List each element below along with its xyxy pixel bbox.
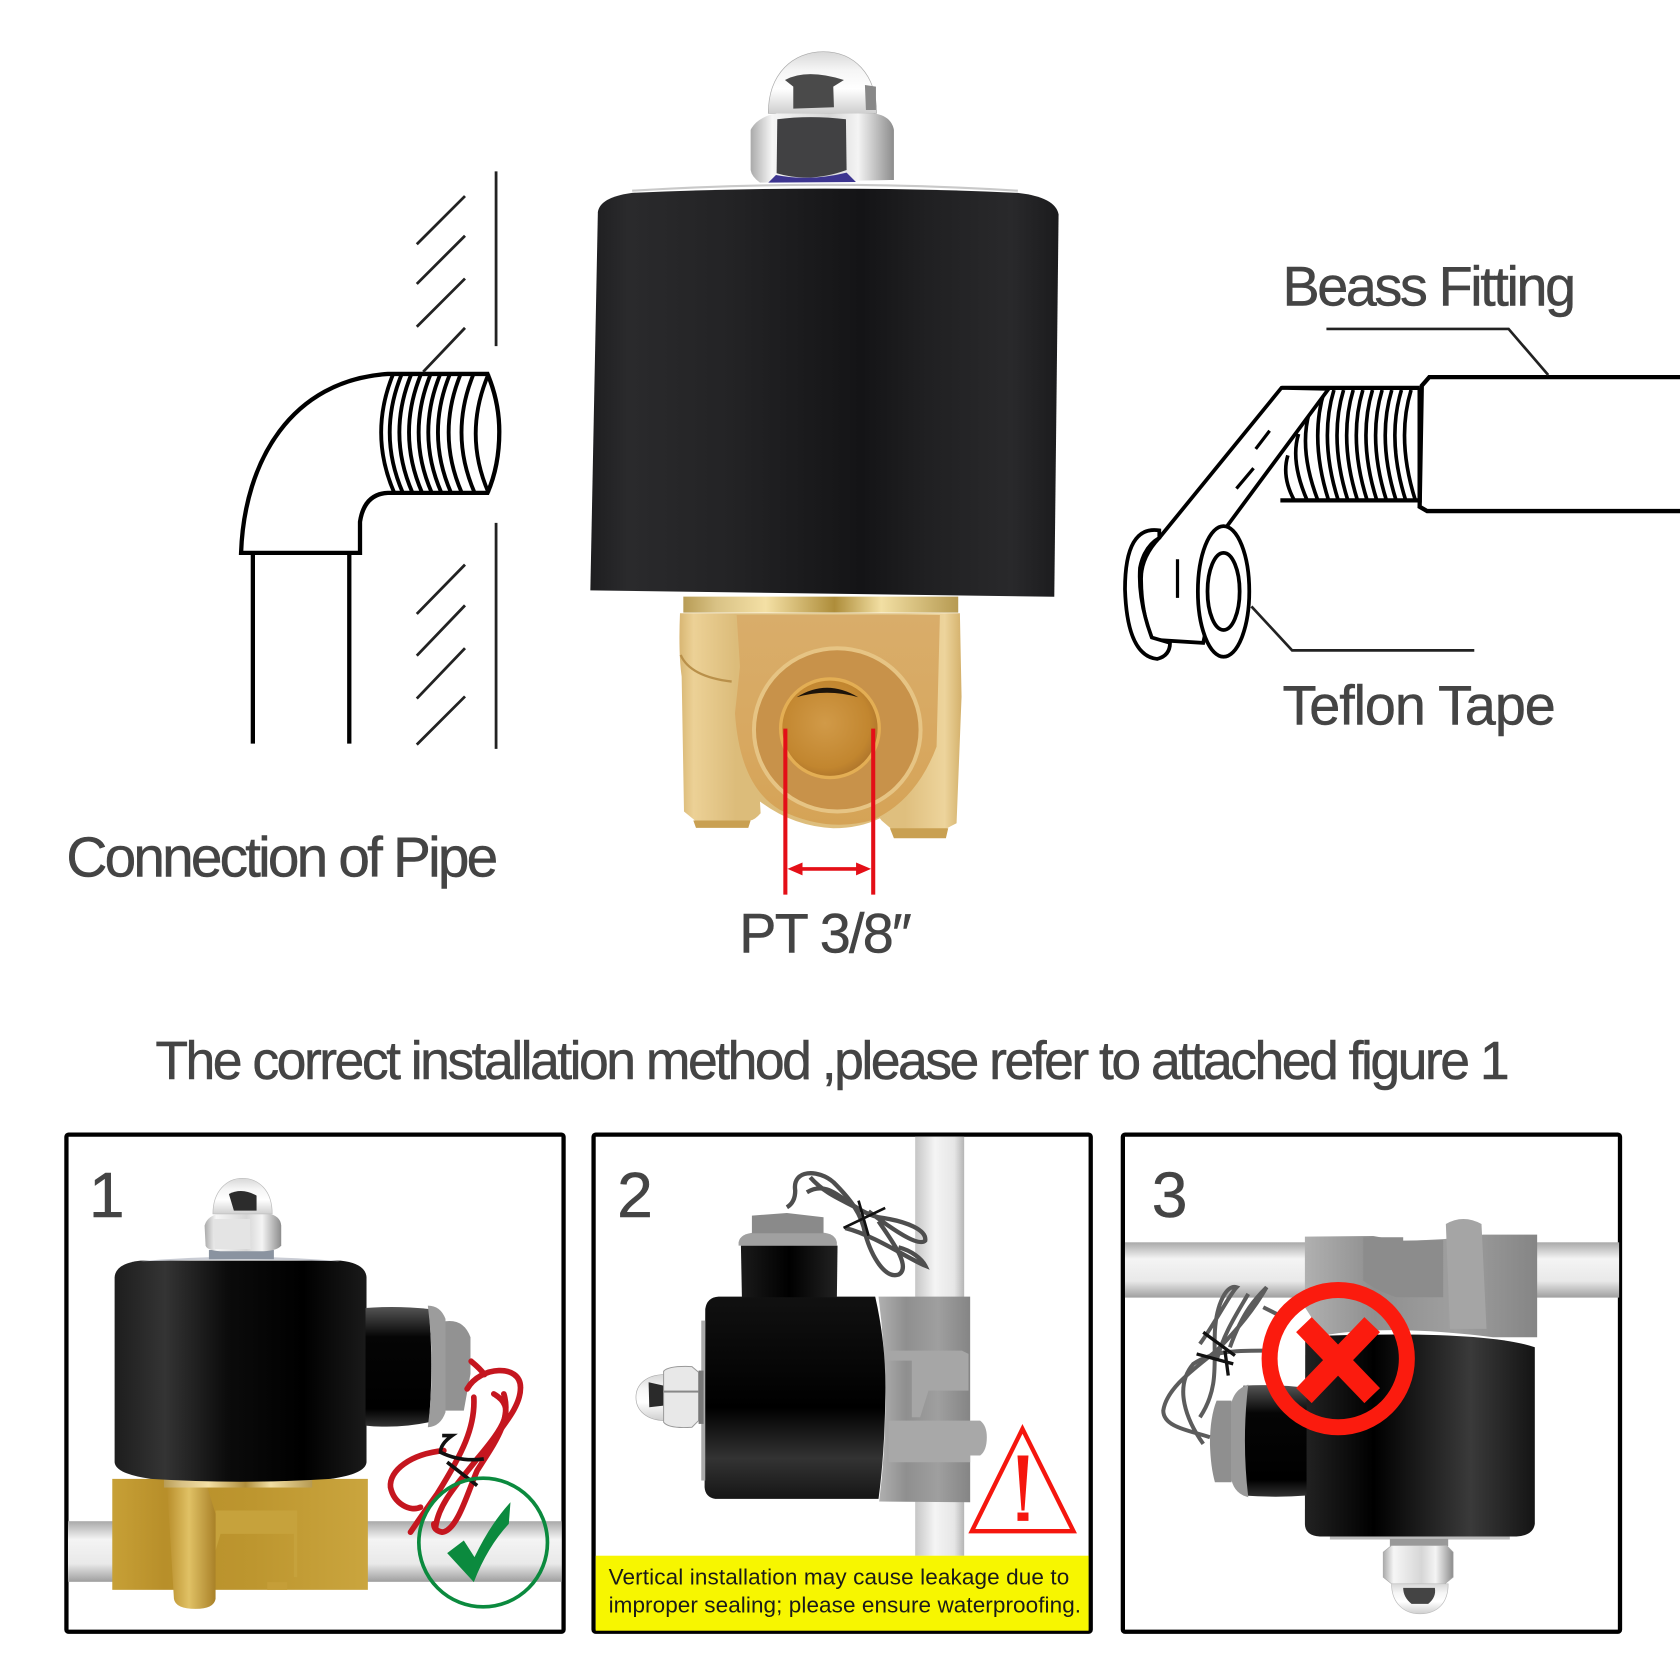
brass band xyxy=(164,1479,312,1488)
chrome cap nut xyxy=(751,52,894,183)
horizontal pipe xyxy=(1125,1242,1619,1298)
grey connector cap xyxy=(445,1321,470,1411)
grey connector cap xyxy=(1210,1401,1232,1482)
red dimension marker xyxy=(785,729,873,895)
label: connection of pipe: Connection of Pipe xyxy=(66,826,498,889)
warning triangle xyxy=(972,1429,1073,1531)
pipe walls xyxy=(253,553,349,744)
steel boss xyxy=(889,1421,987,1462)
panel 2 valve illustration xyxy=(636,1137,1073,1556)
tape roll back flange xyxy=(1125,530,1170,659)
connector ring xyxy=(428,1306,445,1427)
casting face xyxy=(735,615,940,825)
steel casting ridge xyxy=(1363,1237,1443,1297)
thread coils xyxy=(1286,390,1415,500)
left diagram: connection of pipe xyxy=(241,171,499,749)
coil connector xyxy=(741,1246,838,1297)
yellow warning banner: improper sealing; please ensure waterproofing. xyxy=(609,1593,1081,1618)
foot ends xyxy=(693,821,948,838)
yellow warning banner xyxy=(596,1556,1089,1631)
panel 3 frame xyxy=(1123,1135,1620,1632)
chrome nut xyxy=(205,1178,281,1259)
black coil housing xyxy=(590,189,1059,597)
green check badge xyxy=(419,1478,547,1607)
brass band xyxy=(683,597,958,613)
tape strip dashes xyxy=(1178,431,1270,598)
elbow fitting outline xyxy=(241,374,499,553)
tape roll core xyxy=(1208,553,1240,630)
coil connector xyxy=(1243,1385,1307,1497)
right diagram: teflon tape on brass fitting xyxy=(1125,329,1680,659)
brass body xyxy=(679,613,962,831)
connector ring xyxy=(1232,1385,1248,1497)
yellow warning banner: Vertical installation may cause leakage due to xyxy=(609,1565,1069,1590)
central brass solenoid valve photo xyxy=(590,52,1059,838)
pipe thread coils xyxy=(381,374,489,493)
wall section with hatching xyxy=(417,171,496,749)
panel 2 number: 2 xyxy=(617,1159,653,1231)
black housing xyxy=(705,1297,885,1499)
port bore xyxy=(781,679,879,778)
panel 1 valve illustration xyxy=(68,1178,562,1609)
housing top rim xyxy=(632,185,1018,191)
vertical pipe xyxy=(915,1137,964,1556)
steel body xyxy=(879,1297,970,1502)
steel casting ridge xyxy=(887,1351,968,1417)
tape strip xyxy=(1141,388,1329,643)
panel 3: incorrect inverted install xyxy=(1123,1135,1620,1632)
wire tie xyxy=(440,1436,484,1486)
valve seat slit xyxy=(797,688,858,697)
chrome nut xyxy=(636,1366,704,1428)
grey wire bundle xyxy=(1163,1287,1277,1444)
connector ring xyxy=(739,1233,837,1246)
housing rim xyxy=(701,1321,705,1481)
panel 1 frame xyxy=(66,1135,564,1632)
horizontal pipe xyxy=(68,1521,562,1582)
red wire bundle xyxy=(390,1361,520,1532)
red prohibition mark xyxy=(1270,1290,1407,1427)
leader lines xyxy=(1251,329,1548,650)
brass body xyxy=(112,1479,368,1590)
tape roll front xyxy=(1198,526,1249,657)
fitting pipe xyxy=(1420,377,1680,511)
threaded port xyxy=(754,648,921,812)
panel 1 number: 1 xyxy=(89,1159,125,1231)
wire tie xyxy=(844,1201,885,1236)
tape-wrapped thread xyxy=(1280,388,1420,500)
brass casting xyxy=(679,597,962,838)
black housing xyxy=(1305,1334,1535,1537)
steel boss xyxy=(1446,1219,1486,1329)
brass casting ridge xyxy=(207,1511,297,1577)
panel 2: vertical install warning xyxy=(594,1135,1091,1632)
housing rim xyxy=(1330,1537,1510,1540)
chrome nut xyxy=(1383,1539,1453,1614)
panel 3 number: 3 xyxy=(1152,1159,1188,1231)
label: PT size: PT 3/8″ xyxy=(739,902,912,964)
brass foot xyxy=(167,1487,216,1609)
housing rim xyxy=(141,1257,341,1261)
dark wire bundle xyxy=(787,1173,925,1275)
panel 1: correct horizontal install xyxy=(66,1135,564,1632)
coil connector xyxy=(366,1307,431,1427)
panel 3 valve illustration xyxy=(1125,1219,1619,1614)
small brass bump xyxy=(267,1582,287,1590)
label: beass fitting: Beass Fitting xyxy=(1282,255,1576,317)
grey connector cap xyxy=(752,1213,824,1233)
black housing xyxy=(115,1261,367,1482)
steel body xyxy=(1305,1235,1537,1337)
panel 2 frame xyxy=(594,1135,1091,1632)
left lobe crease xyxy=(681,655,732,682)
wire ties xyxy=(1197,1332,1235,1376)
section heading: The correct installation method ,please refer to attached figure 1 xyxy=(155,1032,1510,1091)
label: teflon tape: Teflon Tape xyxy=(1282,674,1556,736)
